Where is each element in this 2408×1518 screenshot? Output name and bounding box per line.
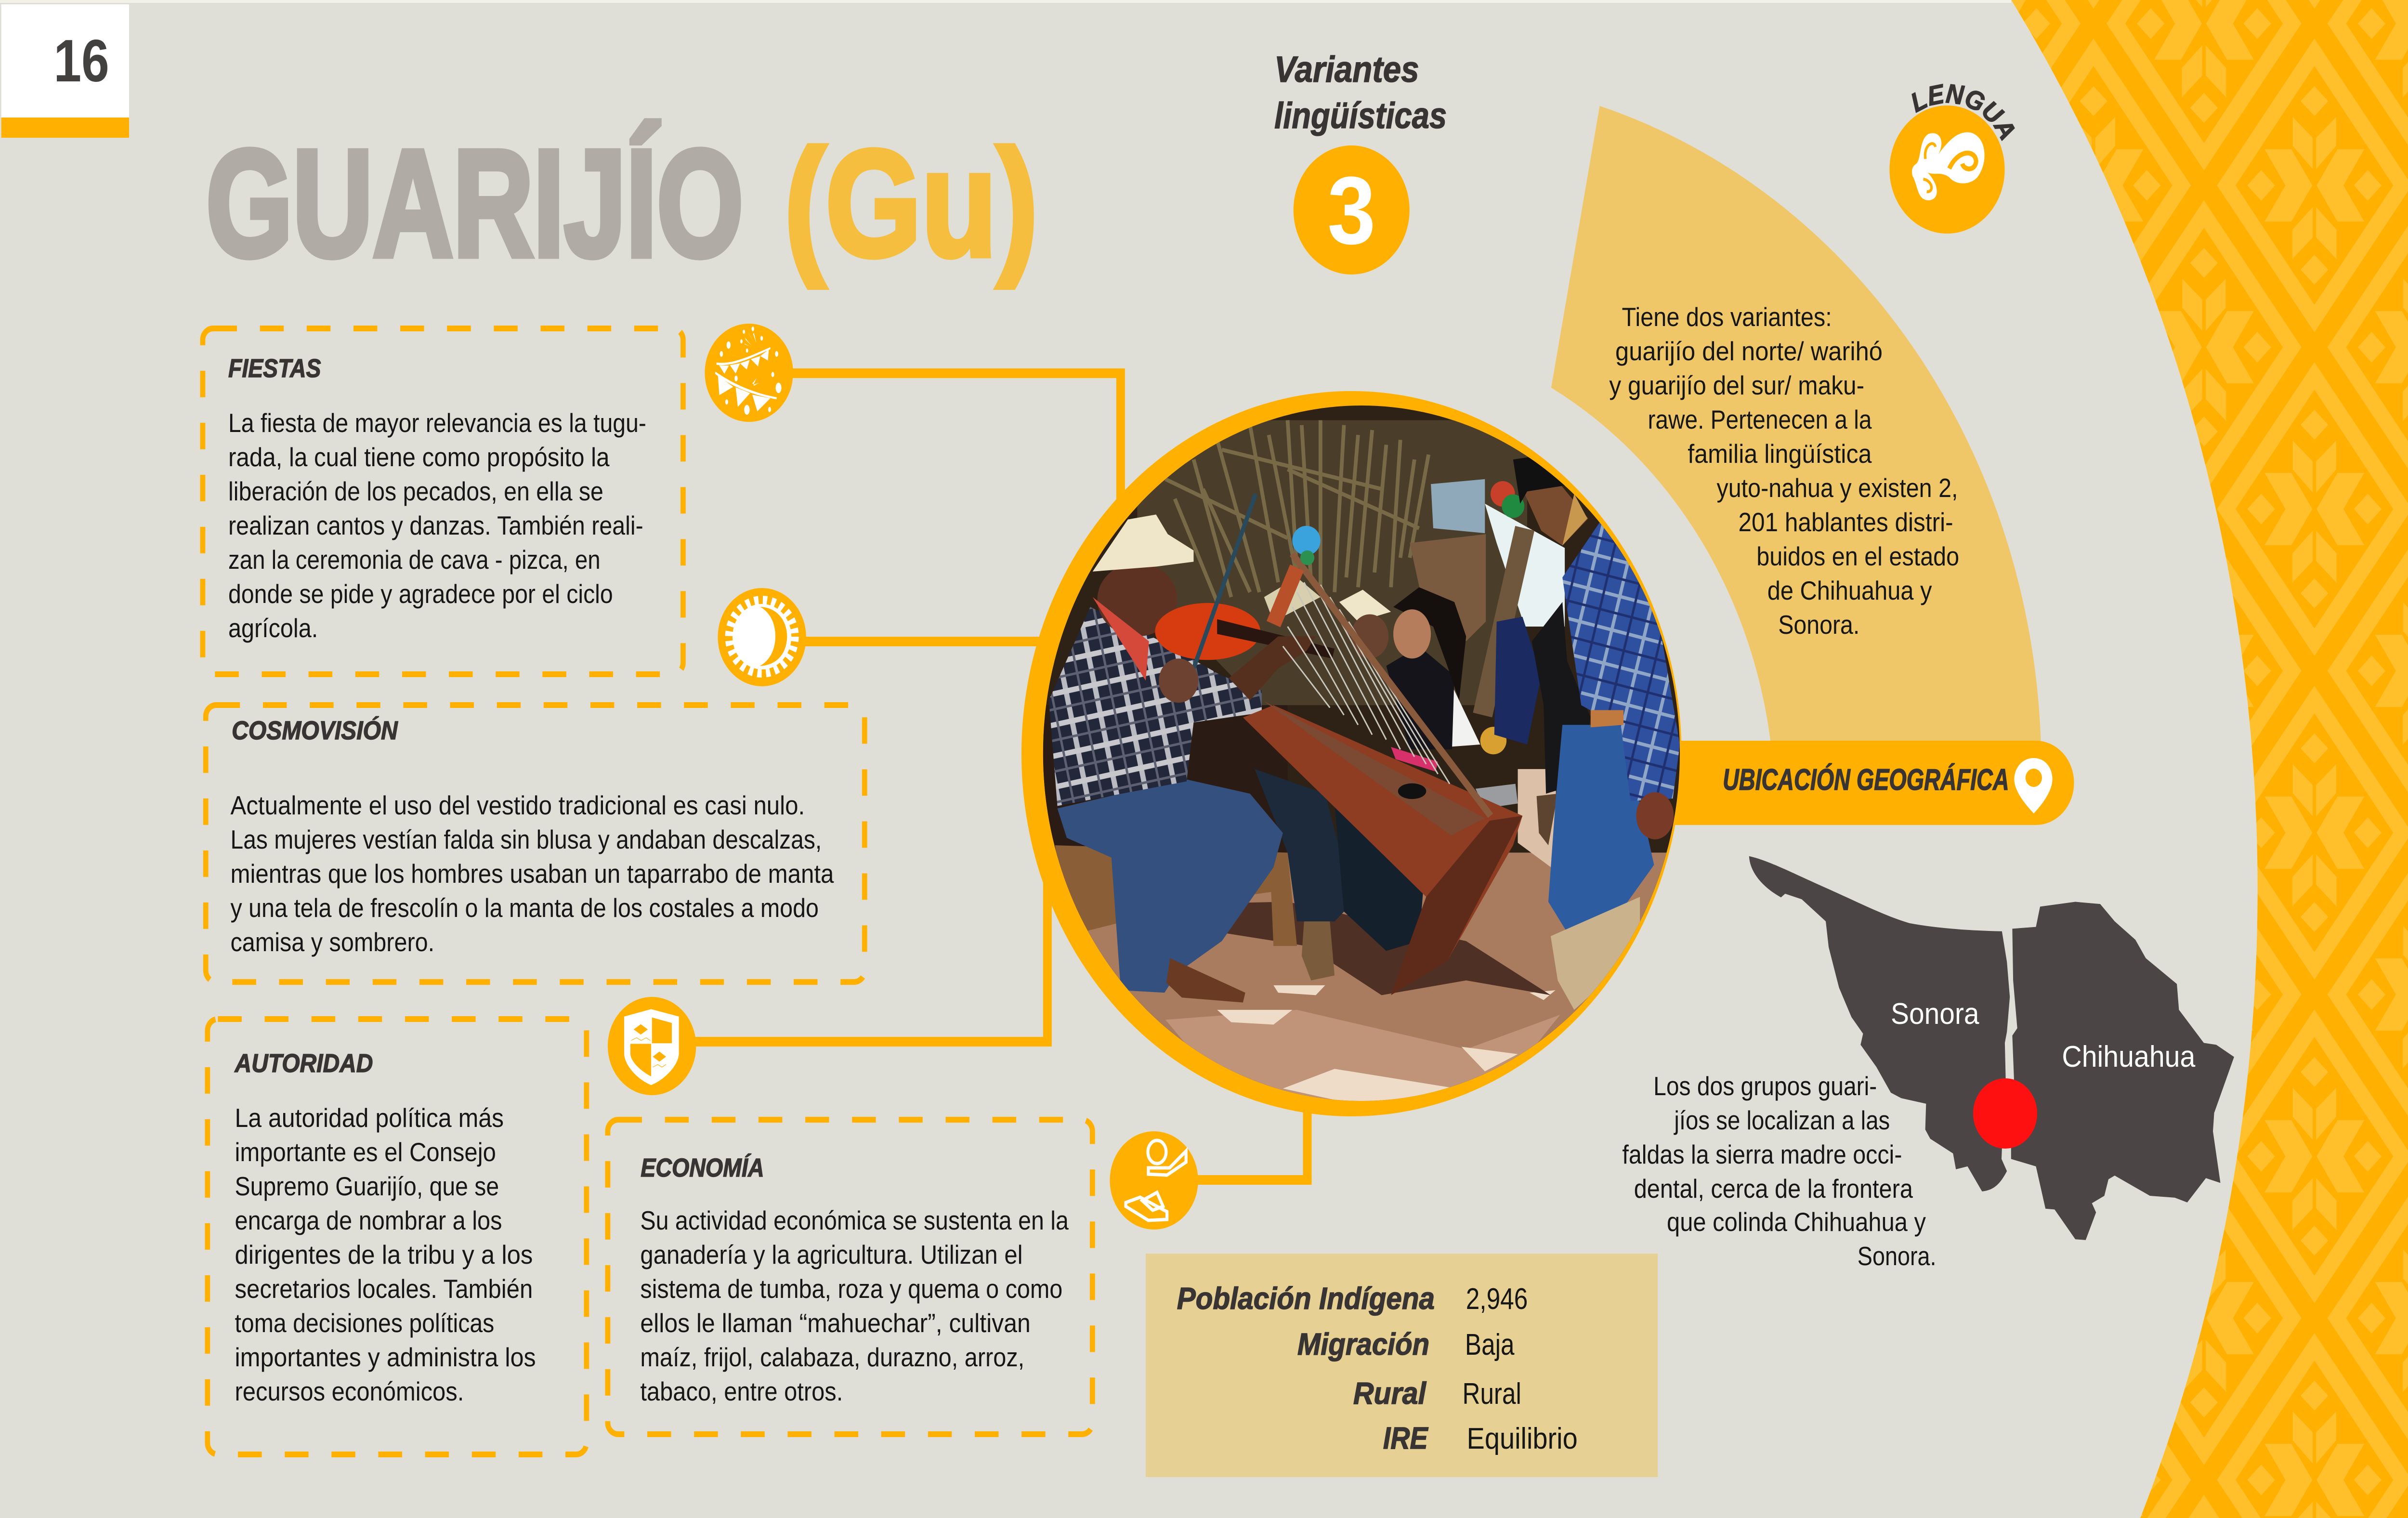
text: economía: ellos le llaman “mahuechar”, cultivan bbox=[640, 1309, 1031, 1338]
connector lines bbox=[684, 373, 1308, 1180]
text: cosmovisión: Las mujeres vestían falda sin blusa y andaban descalzas, bbox=[231, 825, 822, 855]
text block: location: dental, cerca de la frontera bbox=[1634, 1175, 1913, 1204]
panel: demographic stats: Población Indígena bbox=[1177, 1281, 1435, 1316]
text block: location: faldas la sierra madre occi- bbox=[1622, 1140, 1902, 1170]
text block: lengua: familia lingüística bbox=[1688, 440, 1872, 469]
text block: location: Los dos grupos guari- bbox=[1653, 1072, 1877, 1101]
panel: demographic stats: IRE bbox=[1383, 1421, 1429, 1455]
text: cosmovisión: camisa y sombrero. bbox=[231, 928, 434, 957]
map: sonora and chihuahua bbox=[1749, 856, 2234, 1240]
text: cosmovisión: Actualmente el uso del vestido tradicional es casi nulo. bbox=[231, 791, 805, 821]
dancer: head bbox=[1522, 484, 1588, 546]
text: cosmovisión: mientras que los hombres usaban un taparrabo de manta bbox=[231, 860, 834, 889]
icon: location pin bbox=[2014, 758, 2053, 813]
panel: language wedge bbox=[1551, 106, 2041, 751]
icon: lengua bbox=[1889, 105, 2005, 234]
label: lengua arched text: LENGUA bbox=[1911, 84, 2015, 142]
text: autoridad: dirigentes de la tribu y a los bbox=[235, 1241, 533, 1270]
title: (Gu) bbox=[785, 119, 1038, 289]
seated bench bbox=[1055, 845, 1297, 946]
text: fiestas bbox=[228, 409, 646, 643]
photo: musicians with violin and harp bbox=[1043, 406, 1680, 1101]
dancer: shirt bbox=[1562, 519, 1680, 801]
title: GUARIJÍO bbox=[206, 119, 743, 288]
text: fiestas: La fiesta de mayor relevancia es la tugu- bbox=[228, 409, 646, 438]
text block: lengua bbox=[1609, 303, 1959, 640]
text: fiestas: realizan cantos y danzas. También reali- bbox=[228, 511, 643, 541]
figure in black at the back bbox=[1532, 602, 1591, 794]
text block: location bbox=[1622, 1072, 1937, 1271]
harp strings and frame bbox=[1283, 577, 1450, 784]
dancer: jeans bbox=[1548, 725, 1654, 936]
dancer: leg shells bbox=[1551, 897, 1640, 1010]
heading: cosmovisión: COSMOVISIÓN bbox=[232, 716, 398, 745]
badge: number of variants: 3 bbox=[1327, 157, 1375, 264]
panel: demographic stats bbox=[1146, 1254, 1658, 1477]
text: economía bbox=[640, 1206, 1069, 1407]
text block: lengua: de Chihuahua y bbox=[1767, 576, 1932, 606]
photo ring bbox=[1021, 391, 1682, 1116]
marker: guarijío region bbox=[1973, 1078, 2037, 1149]
text: fiestas: agrícola. bbox=[228, 614, 318, 643]
text: autoridad: encarga de nombrar a los bbox=[235, 1206, 502, 1236]
panel: demographic stats: Baja bbox=[1465, 1328, 1515, 1361]
people behind harp bbox=[1339, 589, 1391, 622]
page number tab bbox=[1, 4, 129, 138]
icon: shield bbox=[608, 997, 696, 1095]
text block: lengua: buidos en el estado bbox=[1756, 542, 1959, 572]
panel: demographic stats: Equilibrio bbox=[1467, 1422, 1578, 1455]
text block: lengua: 201 hablantes distri- bbox=[1738, 508, 1953, 537]
heading: fiestas: FIESTAS bbox=[228, 354, 321, 383]
panel: cosmovisión bbox=[206, 705, 864, 982]
icon: sun and moon bbox=[718, 588, 806, 686]
panel: demographic stats: 2,946 bbox=[1466, 1282, 1528, 1316]
harp body bbox=[1243, 705, 1522, 995]
heading: economía: ECONOMÍA bbox=[641, 1153, 764, 1182]
banner: ubicación geográfica: UBICACIÓN GEOGRÁFICA bbox=[1723, 763, 2009, 797]
text: autoridad: Supremo Guarijío, que se bbox=[235, 1172, 499, 1202]
violin and bow bbox=[1155, 603, 1260, 660]
dark interior bbox=[1043, 705, 1288, 858]
panel: demographic stats: Rural bbox=[1353, 1376, 1426, 1411]
text: fiestas: liberación de los pecados, en ella se bbox=[228, 477, 603, 507]
floor bbox=[1057, 852, 1666, 1101]
text: economía: ganadería y la agricultura. Utilizan el bbox=[640, 1241, 1023, 1270]
region: chihuahua bbox=[2011, 902, 2234, 1240]
text: autoridad: La autoridad política más bbox=[235, 1104, 504, 1133]
text block: lengua: Tiene dos variantes: bbox=[1622, 303, 1832, 332]
man with violin: head and hat bbox=[1097, 563, 1177, 636]
banner: ubicación geográfica bbox=[1559, 741, 2074, 825]
label: sonora: Sonora bbox=[1891, 997, 1979, 1031]
text: autoridad: importantes y administra los bbox=[235, 1343, 536, 1373]
text: autoridad bbox=[235, 1104, 536, 1407]
text block: lengua: rawe. Pertenecen a la bbox=[1648, 406, 1872, 435]
text block: location: que colinda Chihuahua y bbox=[1667, 1208, 1926, 1237]
heading: variantes lingüísticas: lingüísticas bbox=[1274, 96, 1447, 136]
text: economía: Su actividad económica se sustenta en la bbox=[640, 1206, 1069, 1236]
region: sonora bbox=[1749, 856, 2010, 1191]
heading: variantes lingüísticas bbox=[1274, 50, 1447, 136]
text block: location: jíos se localizan a las bbox=[1674, 1106, 1890, 1136]
icon: hands exchanging bbox=[1110, 1131, 1198, 1230]
text: cosmovisión: y una tela de frescolín o la manta de los costales a modo bbox=[231, 894, 819, 923]
board and post bbox=[1410, 534, 1486, 641]
text: autoridad: recursos económicos. bbox=[235, 1377, 464, 1407]
panel: autoridad bbox=[208, 1019, 587, 1454]
panel: fiestas bbox=[203, 328, 683, 674]
man with violin: shirt bbox=[1049, 607, 1262, 806]
text block: lengua: yuto-nahua y existen 2, bbox=[1716, 474, 1958, 503]
page number tab: 16 bbox=[54, 27, 109, 94]
text block: lengua: y guarijío del sur/ maku- bbox=[1609, 371, 1864, 401]
text: autoridad: secretarios locales. También bbox=[235, 1275, 533, 1304]
text: autoridad: importante es el Consejo bbox=[235, 1138, 496, 1167]
heading: variantes lingüísticas: Variantes bbox=[1274, 50, 1419, 90]
text: economía: maíz, frijol, calabaza, durazno, arroz, bbox=[640, 1343, 1024, 1373]
text: fiestas: donde se pide y agradece por el ciclo bbox=[228, 580, 613, 609]
text: economía: tabaco, entre otros. bbox=[640, 1377, 843, 1407]
text: autoridad: toma decisiones políticas bbox=[235, 1309, 494, 1338]
label: chihuahua: Chihuahua bbox=[2062, 1040, 2196, 1073]
text: economía: sistema de tumba, roza y quema o como bbox=[640, 1275, 1062, 1304]
panel: demographic stats: Rural bbox=[1463, 1377, 1521, 1411]
text block: lengua: Sonora. bbox=[1778, 611, 1859, 640]
text block: lengua: guarijío del norte/ warihó bbox=[1615, 337, 1883, 366]
badge: number of variants bbox=[1294, 145, 1410, 275]
panel: economía bbox=[608, 1120, 1092, 1434]
seated person jeans and boot bbox=[1255, 769, 1353, 921]
panel: demographic stats: Migración bbox=[1297, 1327, 1429, 1361]
thatch bbox=[1137, 420, 1527, 705]
heading: autoridad: AUTORIDAD bbox=[234, 1049, 373, 1078]
icon: fiestas bunting bbox=[705, 324, 793, 422]
text: fiestas: zan la ceremonia de cava - pizca, en bbox=[228, 546, 601, 575]
text block: location: Sonora. bbox=[1858, 1242, 1937, 1271]
sky gap and decorations bbox=[1485, 504, 1565, 627]
man with violin: legs bbox=[1058, 779, 1283, 993]
text: cosmovisión bbox=[231, 791, 834, 957]
text: fiestas: rada, la cual tiene como propósito la bbox=[228, 443, 610, 472]
